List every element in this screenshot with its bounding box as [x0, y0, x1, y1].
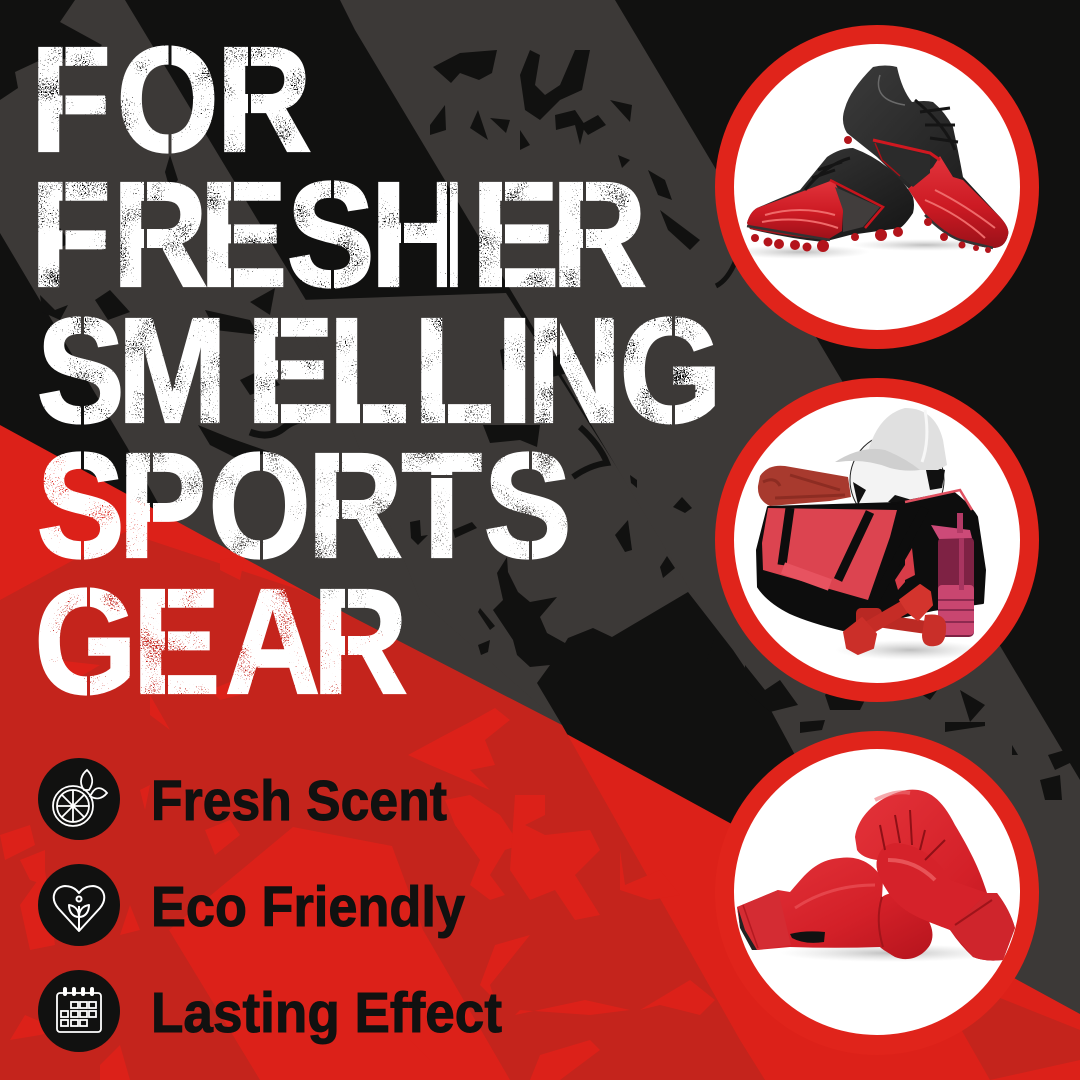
headline line: FOR: FOR — [30, 15, 312, 183]
bag straps — [778, 508, 874, 582]
headline line: SMELLING: SMELLING — [37, 286, 722, 454]
label: Eco Friendly: Eco Friendly — [151, 875, 465, 939]
feature: Eco Friendly — [38, 864, 465, 946]
dumbbells — [844, 585, 946, 654]
upper glove — [855, 790, 1015, 961]
duffel bag red panel — [762, 508, 897, 600]
red panel bright chips — [0, 555, 715, 1080]
rear boot — [843, 66, 1008, 253]
icon: heart with sprout — [38, 864, 120, 946]
red diagonal panel — [0, 425, 1080, 1080]
towel — [758, 466, 851, 506]
headline lines on dark — [38, 45, 715, 424]
tyre tread pattern: black chips — [40, 50, 1072, 900]
floor shadow — [850, 642, 969, 658]
headline — [38, 45, 715, 696]
lower glove — [737, 857, 932, 959]
icon: calendar — [38, 970, 120, 1052]
cap — [835, 408, 947, 471]
duffel bag body — [757, 492, 985, 630]
feature: Lasting Effect — [38, 970, 502, 1052]
boot shadows — [749, 246, 856, 258]
water bottle — [931, 513, 974, 637]
photo circle: gym bag with gear — [715, 378, 1039, 702]
label: Fresh Scent: Fresh Scent — [151, 769, 447, 833]
headline line: SPORTS: SPORTS — [37, 421, 572, 589]
headline line: FRESHER: FRESHER — [30, 150, 647, 318]
headline lines on red — [38, 451, 568, 696]
feature: Fresh Scent — [38, 758, 447, 840]
front boot — [747, 148, 914, 252]
headline line: GEAR: GEAR — [34, 557, 408, 725]
red panel tread texture — [0, 532, 1080, 1080]
icon: citrus slice — [38, 758, 120, 840]
football — [850, 440, 945, 504]
floor shadow — [802, 946, 972, 960]
photo circle: football boots — [715, 25, 1039, 349]
label: Lasting Effect: Lasting Effect — [151, 981, 502, 1045]
photo circle: boxing gloves — [730, 731, 1039, 1035]
